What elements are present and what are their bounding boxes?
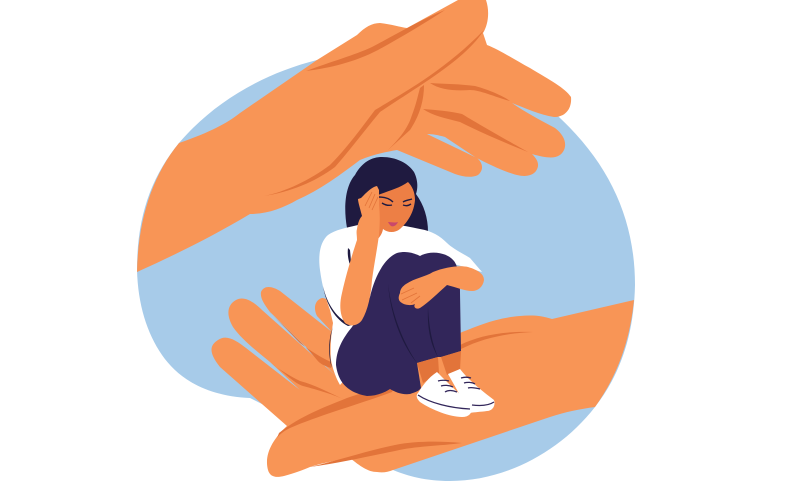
neck and face <box>372 182 415 243</box>
palm side crease <box>388 85 424 150</box>
closed eyes and brows <box>379 197 412 206</box>
left shoe <box>417 372 472 417</box>
shoe laces and soles <box>418 377 494 409</box>
knuckle lines <box>401 288 420 303</box>
palm crease <box>277 385 395 438</box>
hair <box>345 157 428 240</box>
trousers <box>336 252 461 396</box>
white t-shirt <box>319 225 482 385</box>
blue background blob <box>137 53 635 481</box>
upper hand <box>137 0 571 272</box>
thumb crease <box>310 442 462 467</box>
lower hand <box>212 287 634 477</box>
right shoe <box>448 369 495 413</box>
woman sitting <box>319 157 495 417</box>
wrist to thumb crease <box>264 30 484 196</box>
upper thumb crease <box>306 10 445 71</box>
finger crease <box>271 363 345 400</box>
finger crease <box>266 309 331 368</box>
shirt fold shadow <box>323 248 352 368</box>
hand finger lines <box>365 192 378 210</box>
bare ankles <box>417 351 461 383</box>
trouser fold lines <box>388 284 438 363</box>
palm line <box>460 332 533 349</box>
finger crease 1 <box>430 83 510 101</box>
forearm and hand on knee <box>399 266 484 309</box>
lips <box>388 222 398 226</box>
raised arm and hand on head <box>340 186 380 325</box>
finger crease 2 <box>423 109 528 152</box>
